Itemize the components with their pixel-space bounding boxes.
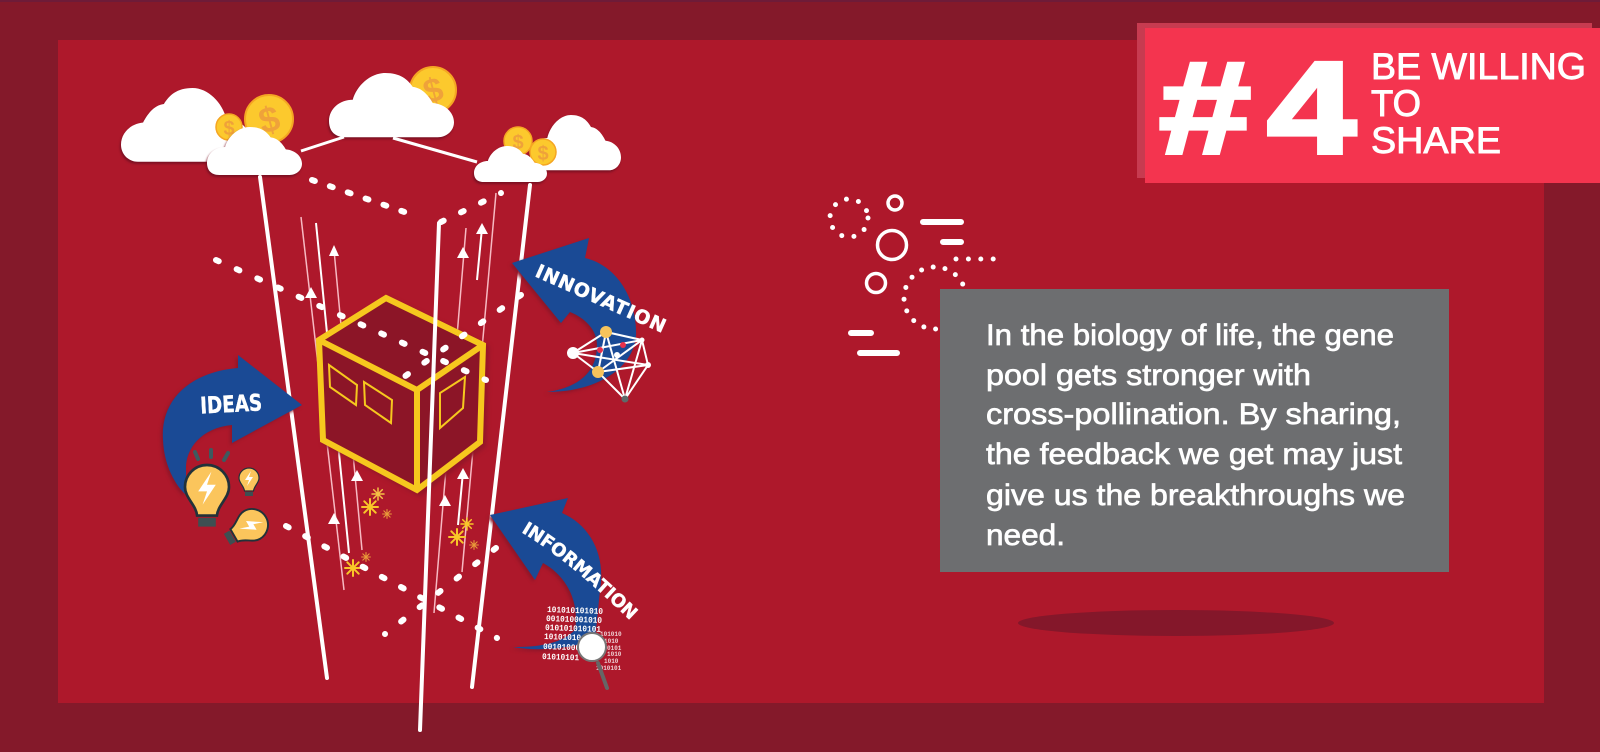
illustration: cloud data cube xyxy=(119,66,670,732)
body text: cross-pollination. By sharing, xyxy=(986,398,1401,431)
coins xyxy=(216,67,556,165)
innovation arrow: INNOVATION xyxy=(532,260,670,338)
binary data and magnifier: 101010101010 xyxy=(547,605,603,617)
binary data and magnifier: 010101010101 xyxy=(545,623,601,635)
icon: light bulbs xyxy=(185,450,274,553)
innovation arrow xyxy=(512,238,670,392)
body text xyxy=(986,319,1405,552)
body text: the feedback we get may just xyxy=(986,438,1403,471)
binary data and magnifier: 1010 xyxy=(604,638,619,645)
banner number: 4 xyxy=(1267,34,1356,181)
front clouds xyxy=(207,73,547,182)
coins: $ xyxy=(537,143,549,165)
banner title: TO xyxy=(1371,83,1421,124)
cloud links xyxy=(301,137,477,162)
binary data and magnifier: 101010 xyxy=(600,631,622,638)
banner xyxy=(1137,23,1600,183)
banner title: BE WILLING xyxy=(1371,46,1586,87)
coins: $ xyxy=(223,118,235,140)
back clouds xyxy=(121,88,621,170)
binary data and magnifier: 1010 xyxy=(607,651,622,658)
binary data and magnifier: 00101000 xyxy=(543,642,580,653)
binary data and magnifier: 001010001010 xyxy=(546,614,602,626)
body text: In the biology of life, the gene xyxy=(986,319,1394,352)
banner title xyxy=(1371,46,1586,161)
banner title: SHARE xyxy=(1371,120,1501,161)
body text: need. xyxy=(986,519,1065,552)
panel shadow xyxy=(1018,610,1334,636)
dotted grid lines xyxy=(216,180,521,638)
isometric cube xyxy=(319,298,483,490)
structural lines xyxy=(260,177,530,730)
binary data and magnifier: 01010101 xyxy=(542,652,579,663)
body text: pool gets stronger with xyxy=(986,359,1311,392)
banner number: # xyxy=(1159,34,1251,181)
information arrow: INFORMATION xyxy=(522,521,638,620)
information arrow xyxy=(488,498,638,652)
coins: $ xyxy=(254,97,284,142)
decorative circles and dashes xyxy=(830,196,994,353)
coins: $ xyxy=(419,70,447,112)
banner number xyxy=(1159,34,1356,181)
binary data and magnifier: 1010101 xyxy=(596,665,622,672)
body text: give us the breakthroughs we xyxy=(986,479,1405,512)
binary data and magnifier: 1010 xyxy=(604,658,619,665)
icon: network xyxy=(567,326,651,402)
yellow sparkles xyxy=(345,488,478,576)
ideas arrow xyxy=(163,355,302,495)
ideas arrow: IDEAS xyxy=(200,390,263,420)
text panel xyxy=(940,289,1449,572)
thin arrows behind the cube xyxy=(301,193,496,613)
binary data and magnifier: 10101010 xyxy=(544,632,581,643)
coins: $ xyxy=(512,132,524,154)
binary data and magnifier: 0101 xyxy=(607,645,622,652)
binary data and magnifier xyxy=(542,605,622,688)
